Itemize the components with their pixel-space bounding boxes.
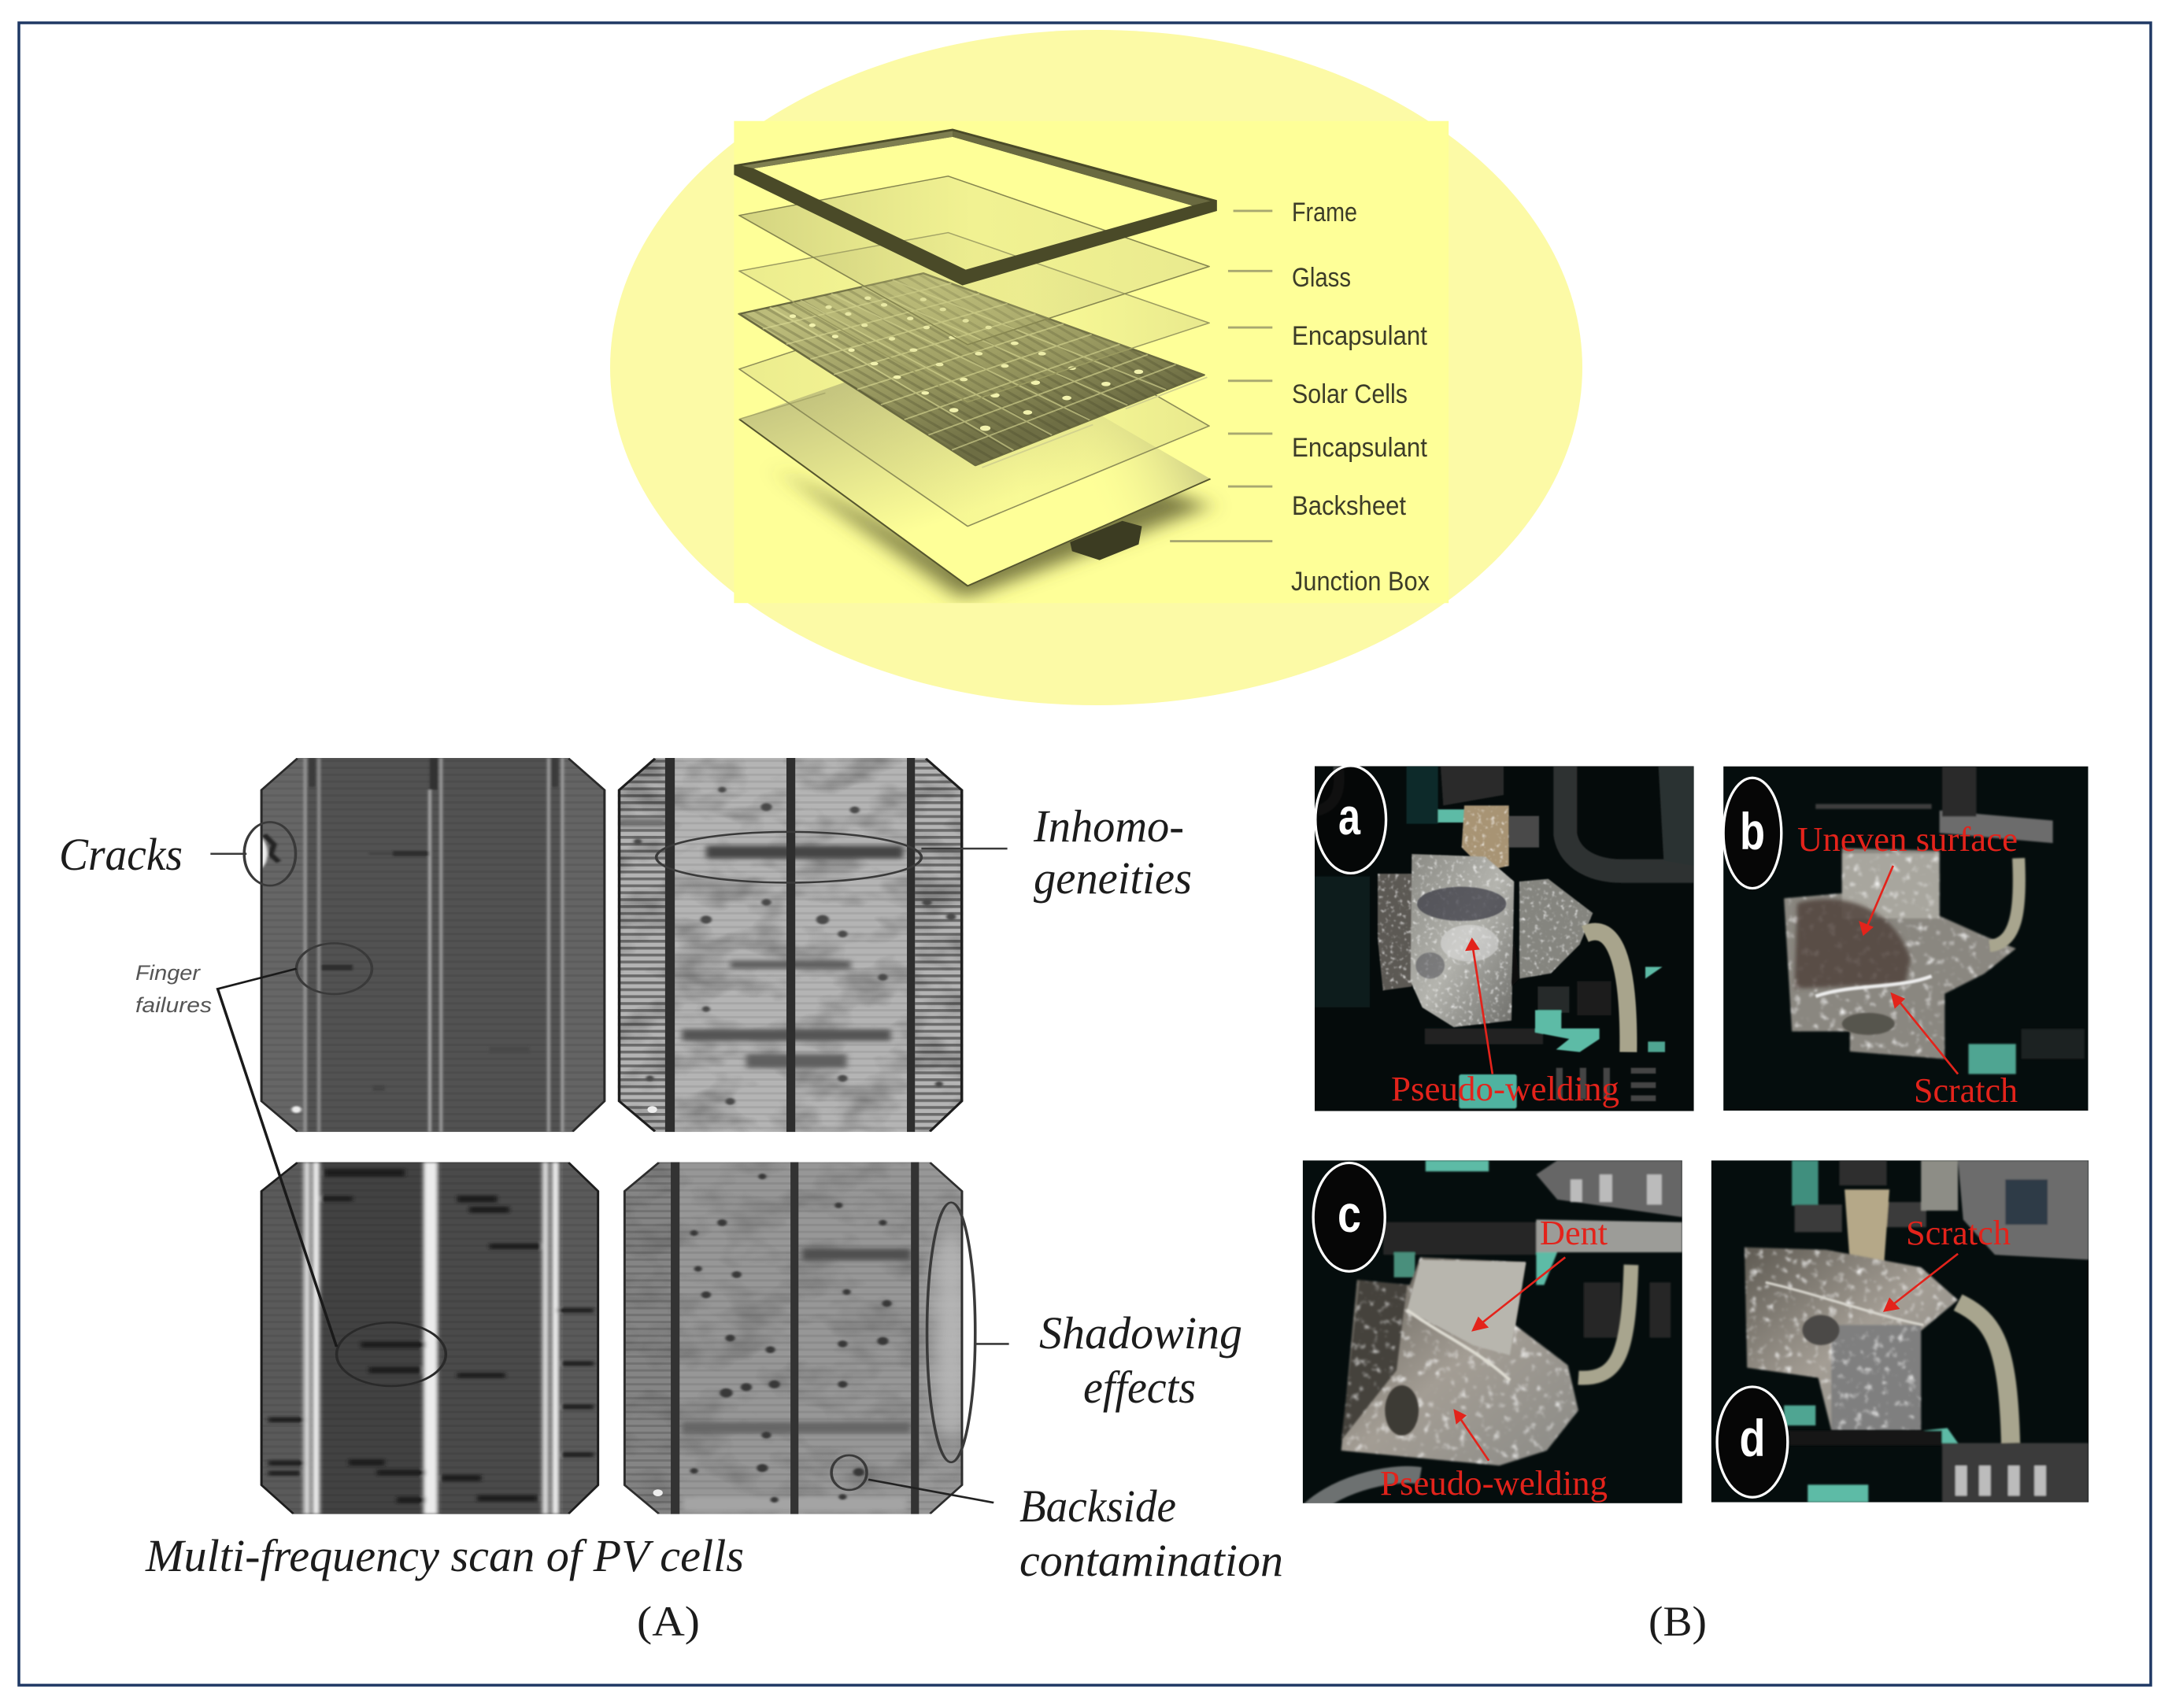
cell scan: bottom right — [623, 1162, 969, 1514]
red defect labels: Scratch — [1906, 1214, 2011, 1252]
badge letters: a — [1338, 787, 1361, 845]
red defect labels: Uneven surface — [1797, 820, 2018, 859]
defect labels: geneities — [1034, 852, 1192, 904]
badge letters: c — [1338, 1185, 1361, 1243]
layer labels: Frame — [1292, 198, 1357, 227]
red arrows — [1453, 866, 1958, 1461]
photo c — [1303, 1160, 1682, 1516]
layer labels: Encapsulant — [1292, 321, 1428, 351]
layer labels: Solar Cells — [1292, 379, 1408, 409]
layer labels: Backsheet — [1292, 491, 1407, 521]
red defect labels: Pseudo-welding — [1380, 1464, 1608, 1503]
defect labels — [59, 800, 1283, 1586]
layer: solar cells — [739, 273, 1207, 468]
defect labels: effects — [1083, 1362, 1196, 1413]
yellow ellipse background — [610, 30, 1582, 705]
badge letters: d — [1740, 1409, 1765, 1467]
photo b — [1723, 767, 2088, 1111]
layer labels — [1291, 198, 1430, 597]
defect labels: Backside — [1019, 1481, 1176, 1532]
badge letters — [1338, 787, 1765, 1467]
label leader lines — [1170, 211, 1272, 542]
defect labels: contamination — [1019, 1535, 1283, 1586]
caption: B: (B) — [1648, 1598, 1707, 1645]
defect circles and leader lines — [210, 822, 1009, 1503]
defect labels: Cracks — [59, 829, 183, 880]
cell scan: bottom left — [261, 1162, 599, 1514]
panel: PV module exploded view — [610, 30, 1582, 705]
layer: frame — [734, 129, 1217, 286]
exploded module layers — [734, 121, 1449, 603]
icon: junction box — [1070, 521, 1142, 560]
red defect labels: Dent — [1540, 1214, 1608, 1252]
defect labels: Finger — [135, 961, 201, 985]
photos b, c, d — [1303, 766, 2089, 1516]
photo a — [1315, 766, 1694, 1111]
layer labels: Glass — [1292, 263, 1351, 293]
layer: backsheet — [739, 338, 1211, 586]
badge letters: b — [1740, 802, 1765, 860]
photo d — [1711, 1160, 2089, 1503]
layer: lower encapsulant — [739, 291, 1209, 527]
panel A: multi-frequency scan of PV cells — [59, 758, 1283, 1645]
layer: upper encapsulant — [739, 233, 1209, 402]
red defect labels: Pseudo-welding — [1391, 1070, 1619, 1108]
scan images — [210, 758, 1009, 1514]
red defect labels — [1380, 820, 2018, 1503]
letter badges — [1313, 766, 1788, 1497]
panel B: junction box solder defects — [1303, 766, 2089, 1645]
cell scan: top left — [248, 758, 605, 1132]
red defect labels: Scratch — [1914, 1071, 2018, 1110]
layer labels: Encapsulant — [1292, 433, 1428, 463]
defect labels: failures — [135, 993, 212, 1017]
defect labels: Inhomo- — [1033, 800, 1184, 852]
layer labels: Junction Box — [1291, 567, 1430, 597]
layer: glass — [739, 176, 1209, 345]
caption: A: (A) — [637, 1598, 700, 1645]
defect labels: Shadowing — [1039, 1307, 1242, 1359]
cell scan: top right — [618, 758, 963, 1132]
caption: multi-frequency scan: Multi-frequency scan of PV cells — [145, 1530, 744, 1581]
shadow under backsheet — [776, 468, 1211, 600]
